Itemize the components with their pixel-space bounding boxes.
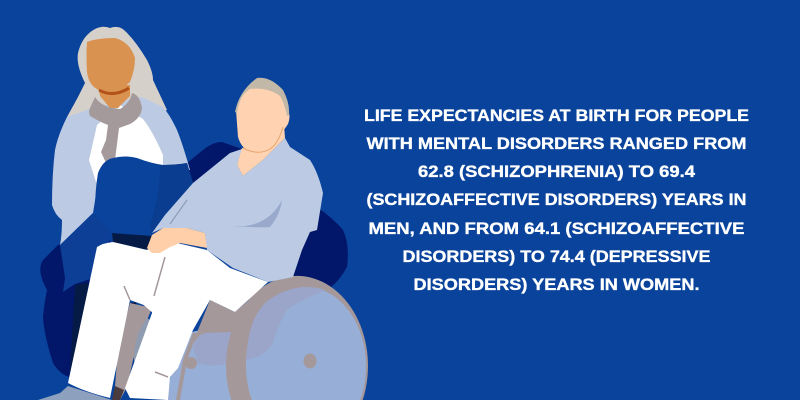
wheel tyre	[226, 276, 368, 400]
woman face	[86, 38, 135, 92]
woman coat	[52, 97, 190, 245]
man hair	[235, 78, 289, 116]
foot shadow	[38, 386, 112, 400]
jaw line	[243, 127, 283, 152]
main statement text: MEN, AND FROM 64.1 (SCHIZOAFFECTIVE	[368, 220, 744, 238]
dark gap	[112, 386, 124, 400]
main statement text: DISORDERS) YEARS IN WOMEN.	[414, 276, 700, 294]
wheelchair frame	[112, 290, 260, 400]
leg join	[140, 246, 172, 313]
main statement text: LIFE EXPECTANCIES AT BIRTH FOR PEOPLE	[364, 107, 749, 125]
woman white shirt	[89, 105, 163, 185]
man trousers	[68, 242, 268, 400]
frame hub	[185, 357, 197, 369]
man neck	[237, 125, 285, 176]
man face	[236, 88, 290, 153]
translucent overlay of chair over woman	[93, 156, 193, 235]
woman coat lower through chair	[60, 213, 112, 292]
wheel hub	[304, 354, 316, 368]
woman scarf	[89, 93, 142, 165]
main statement text: WITH MENTAL DISORDERS RANGED FROM	[366, 135, 746, 153]
woman neck	[98, 85, 130, 108]
wheel	[226, 276, 368, 400]
trouser creases	[124, 257, 168, 377]
far leg	[125, 243, 268, 400]
side panel inner arc	[134, 318, 150, 368]
darker chair fold	[150, 163, 193, 235]
woman dark trousers	[70, 233, 152, 378]
man shirt	[152, 138, 323, 282]
chair seat	[192, 290, 260, 345]
frame tube	[178, 333, 195, 400]
side panel	[115, 303, 152, 400]
wheelchair back cushions	[40, 142, 348, 378]
seat shadow	[193, 332, 232, 366]
main statement text: 62.8 (SCHIZOPHRENIA) TO 69.4	[418, 163, 696, 181]
illustration: woman and man in wheelchair	[38, 27, 368, 400]
main statement text: (SCHIZOAFFECTIVE DISORDERS) YEARS IN	[366, 191, 746, 209]
woman	[52, 27, 190, 245]
man hand	[147, 228, 207, 253]
shirt fold	[232, 200, 282, 227]
main statement text	[364, 107, 749, 294]
woman hair	[67, 27, 167, 130]
woman necklace	[99, 88, 129, 94]
lower seat backing	[165, 330, 240, 400]
wheel shaded cushion	[246, 287, 324, 360]
near leg	[68, 242, 163, 398]
main statement text: DISORDERS) TO 74.4 (DEPRESSIVE	[402, 248, 710, 266]
sleeve line	[170, 200, 187, 224]
wheel inner	[246, 287, 366, 400]
